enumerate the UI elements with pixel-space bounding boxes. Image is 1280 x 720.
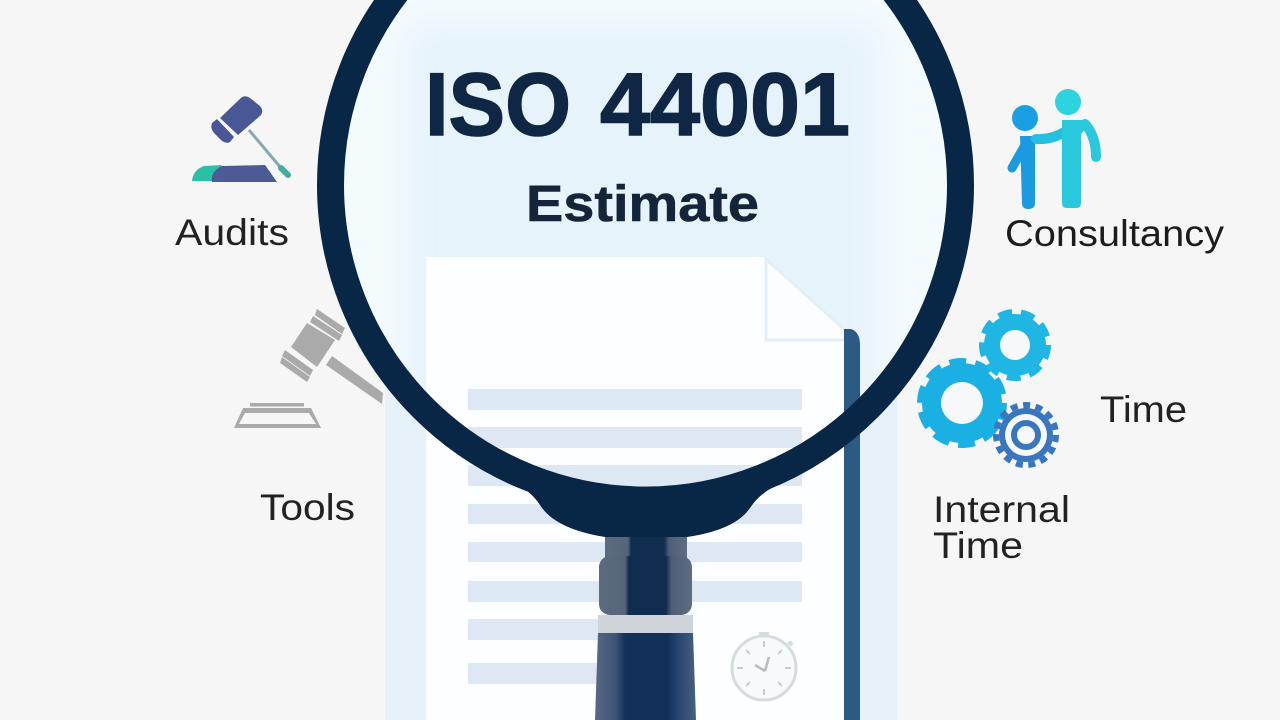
icon: audits gavel (192, 96, 288, 182)
icon: consultancy people (1012, 89, 1096, 209)
frame flare (515, 466, 776, 537)
handle neck (605, 530, 687, 560)
magnifier handle (595, 530, 696, 720)
label: internal time: Time (933, 525, 1023, 566)
handle grip (599, 556, 692, 615)
label: consultancy: Consultancy (1005, 213, 1225, 254)
page fold (766, 259, 845, 340)
label: internal time (933, 489, 1070, 566)
gear: small (996, 405, 1056, 465)
icon: gears (920, 312, 1056, 465)
lens panel tint (413, 32, 872, 396)
label: tools: Tools (260, 487, 355, 528)
title: ISO (425, 54, 571, 154)
gear: large (920, 361, 1004, 445)
document sheet (426, 257, 845, 720)
document spine bar (844, 329, 860, 720)
magnifier frame (330, 0, 960, 537)
icon: tools gavel (234, 309, 383, 428)
text lines (468, 389, 802, 684)
label: time: Time (1100, 389, 1187, 430)
back document panel (385, 70, 897, 720)
label: internal time: Internal (933, 489, 1070, 530)
title: 44001 (600, 54, 850, 154)
icon: stopwatch (732, 632, 796, 700)
subtitle: Estimate (526, 175, 759, 232)
label: audits: Audits (175, 212, 289, 253)
handle ring (598, 615, 693, 634)
title (425, 54, 850, 154)
handle shaft (595, 633, 696, 720)
magnifier lens glass (344, 0, 948, 487)
gear: upper (982, 312, 1048, 378)
